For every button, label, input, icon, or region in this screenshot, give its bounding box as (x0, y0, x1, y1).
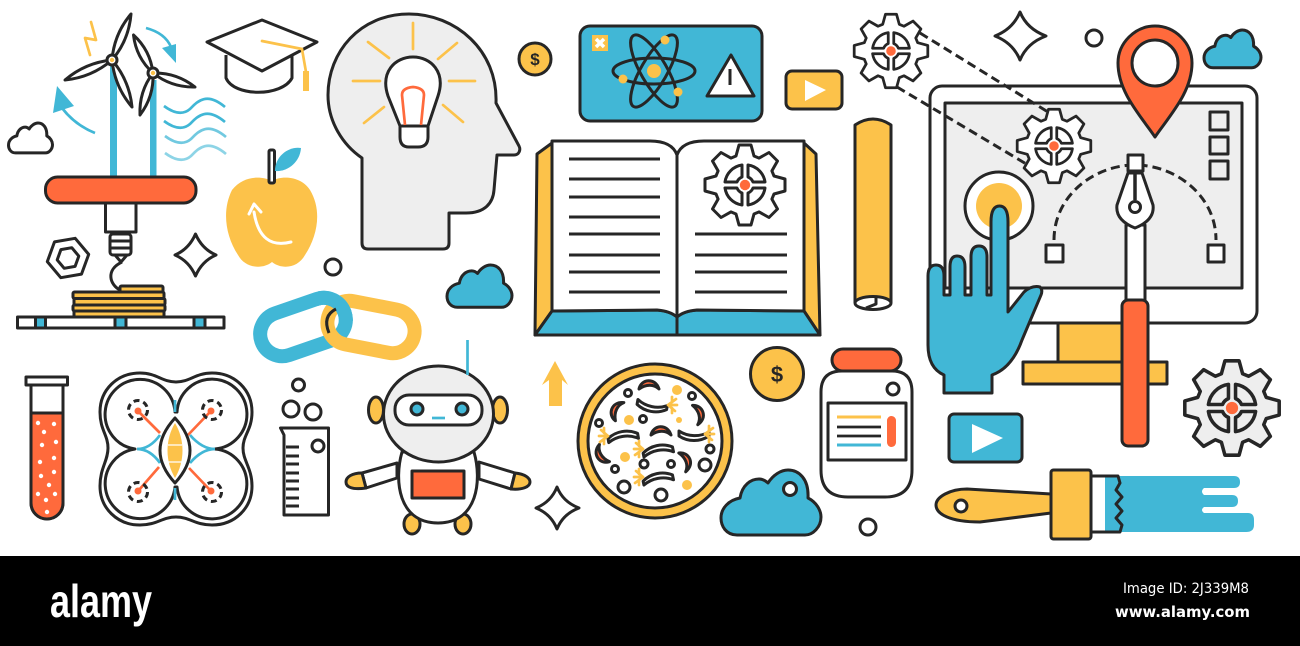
arrow: rotation left (53, 86, 95, 133)
icon: pen tool (1117, 155, 1153, 446)
icon: small cloud (8, 123, 52, 153)
icon: touch button (965, 172, 1033, 240)
icon: map pin (1118, 26, 1192, 137)
icon: beaker (280, 428, 328, 515)
dashed guide lines (897, 33, 1048, 165)
icon: small circle bottom (860, 519, 876, 535)
footer bar (0, 556, 1300, 646)
icon: apple (226, 148, 317, 267)
icon: sparkle bottom (536, 487, 579, 529)
arrow: up (542, 361, 568, 406)
icon: cloud hole (784, 482, 796, 496)
panel: monitor (930, 86, 1257, 384)
icon: dollar coin small (519, 43, 551, 75)
icon: hex nut (47, 238, 89, 278)
website: www.alamy.com (1115, 603, 1250, 621)
wind turbines (65, 14, 195, 177)
icon: jar (821, 349, 912, 497)
icon: drone (100, 373, 252, 525)
text lines (569, 159, 787, 292)
arrow: rotation right (146, 28, 176, 63)
icon: dollar coin large: $ (771, 362, 783, 387)
open book (535, 141, 820, 335)
icon: lightning (85, 22, 96, 55)
icon: pointing hand (928, 206, 1042, 393)
icon: dollar coin small: $ (530, 50, 540, 69)
icon: graduation cap (207, 20, 317, 92)
icon: small circle top (1086, 30, 1102, 46)
icon: bezier curve (1046, 165, 1224, 262)
icon: paint brush (936, 470, 1254, 539)
icon: petri dish (578, 364, 732, 518)
icon: test tube (26, 377, 68, 519)
icon: blue cloud (447, 265, 512, 307)
3D printer (18, 177, 224, 328)
gear: monitor (1017, 109, 1091, 183)
gear: book (705, 145, 785, 225)
icon: robot (346, 340, 530, 534)
icon: dollar coin large (750, 348, 804, 400)
icon: chain links (254, 292, 418, 362)
gear: top (854, 14, 928, 88)
icon: wind waves (164, 99, 226, 160)
image id: Image ID: 2J339M8 (1123, 581, 1249, 597)
icon: large blue cloud (721, 470, 821, 535)
logo: alamy (50, 575, 152, 627)
icon: sparkle top (995, 12, 1046, 60)
icon: sparkle (175, 234, 216, 276)
gear: bottom right (1185, 361, 1279, 455)
icon: cloud top right (1204, 30, 1261, 68)
icon: small circle (325, 259, 341, 275)
icon: yellow play button (786, 71, 842, 109)
icon: head with lightbulb (328, 14, 520, 249)
microbes (592, 381, 714, 501)
icon: rolled paper (855, 119, 891, 310)
icon: blue play button (949, 414, 1022, 462)
icon: bubbles (283, 379, 321, 420)
panel: atom warning (580, 26, 762, 121)
